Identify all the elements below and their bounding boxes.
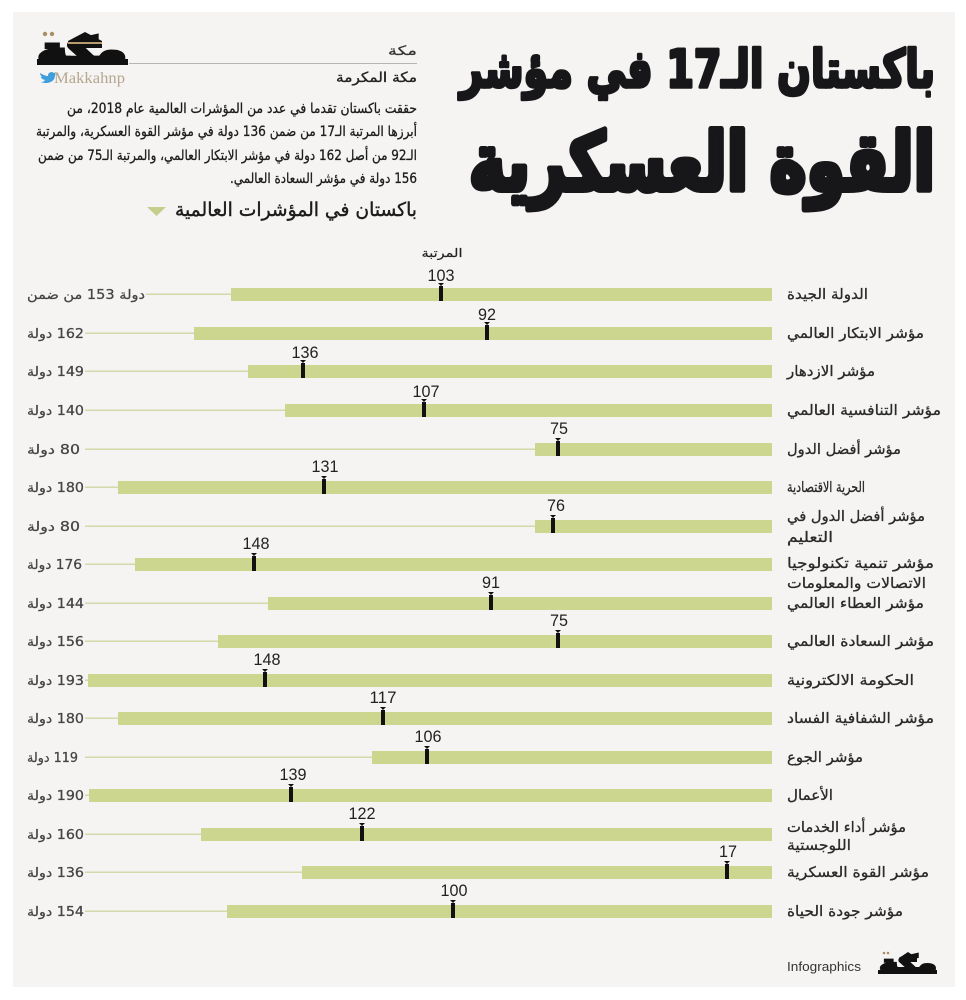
row: Business: 139 <box>280 765 306 784</box>
row: Prosperity <box>27 343 875 380</box>
row: Global Competitiveness: 140 دولة <box>27 404 84 419</box>
title <box>458 40 935 210</box>
row: Prosperity: 149 دولة <box>27 365 84 380</box>
row: ICT Development: مؤشر تنمية تكنولوجيا <box>787 556 934 572</box>
row: Best Countries for Education: التعليم <box>787 530 833 546</box>
row: World Happiness: 156 دولة <box>27 635 84 650</box>
row: Corruption Transparency: 117 <box>370 688 396 707</box>
row: Best Countries: 75 <box>550 419 568 438</box>
row: Best Countries for Education: 76 <box>547 496 565 515</box>
row: Economic Freedom: 180 دولة <box>27 481 84 496</box>
row: World Giving: 91 <box>482 573 500 592</box>
row: Logistics Performance: 122 <box>348 804 376 823</box>
row: ICT Development: 148 <box>242 534 270 553</box>
intro text: أبرزها المرتبة الـ17 من ضمن 136 دولة في مؤشر القوة العسكرية، والمرتبة <box>36 122 417 140</box>
row: Corruption Transparency: مؤشر الشفافية الفساد <box>787 711 934 727</box>
intro text: 156 دولة في مؤشر السعادة العالمي. <box>230 171 417 187</box>
row: Economic Freedom: الحرية الاقتصادية <box>787 480 865 496</box>
row: Hunger: 119 دولة <box>27 751 78 766</box>
row: Global Competitiveness: 107 <box>412 382 440 401</box>
row: Global Competitiveness <box>27 382 941 419</box>
intro text: حققت باكستان تقدما في عدد من المؤشرات العالمية عام 2018، من <box>67 101 417 117</box>
row: Economic Freedom: 131 <box>312 457 338 476</box>
row: Quality of Life: 100 <box>440 881 468 900</box>
row: Prosperity: مؤشر الازدهار <box>786 364 875 380</box>
row: Best Countries for Education: 80 دولة <box>27 520 80 535</box>
row: Global Innovation: 162 دولة <box>27 327 84 342</box>
bar chart <box>27 266 941 920</box>
row: World Happiness: 75 <box>550 611 568 630</box>
row: E-Government: 148 <box>254 650 280 669</box>
location: Makkah Al-Mukarramah: مكة المكرمة <box>336 70 417 86</box>
row: World Giving <box>27 573 924 612</box>
location: Makkah: مكة <box>388 44 417 59</box>
row: E-Government: 193 دولة <box>27 674 84 689</box>
row: Prosperity: 136 <box>292 343 318 362</box>
row: ICT Development: 176 دولة <box>27 558 82 573</box>
row: Best Countries for Education: مؤشر أفضل الدول في <box>787 506 925 525</box>
row: Best Countries: 80 دولة <box>27 443 80 458</box>
footer logo: مكة <box>880 952 936 977</box>
intro text <box>36 101 417 187</box>
footer credit: Infographics <box>787 959 862 974</box>
row: Logistics Performance: 160 دولة <box>27 828 84 843</box>
row: Military Strength: 17 <box>719 842 737 861</box>
row: ICT Development: الاتصالات والمعلومات <box>787 576 926 592</box>
row: Corruption Transparency <box>27 688 934 727</box>
icon: heading triangle <box>147 207 166 216</box>
row: World Giving: مؤشر العطاء العالمي <box>787 596 924 612</box>
row: Good Country: 103 <box>428 266 454 285</box>
row: Global Innovation: مؤشر الابتكار العالمي <box>787 326 924 342</box>
rank column label: المرتبة <box>422 246 462 261</box>
logo: Makkah newspaper: مكة <box>38 31 126 71</box>
row: World Happiness: مؤشر السعادة العالمي <box>787 634 934 650</box>
row: Logistics Performance: مؤشر أداء الخدمات <box>787 817 906 836</box>
row: ICT Development <box>27 534 934 592</box>
row: Good Country: دولة 153 من ضمن <box>27 288 145 303</box>
row: Best Countries: مؤشر أفضل الدول <box>787 439 901 458</box>
row: Best Countries <box>27 419 901 458</box>
row: Military Strength: مؤشر القوة العسكرية <box>787 865 929 881</box>
row: Quality of Life <box>27 881 903 920</box>
row: Hunger: مؤشر الجوع <box>787 750 863 766</box>
row: E-Government: الحكومة الالكترونية <box>787 673 914 689</box>
intro text: الـ92 من أصل 162 دولة في مؤشر الابتكار العالمي، والمرتبة الـ75 من ضمن <box>38 146 417 164</box>
footer logo <box>878 952 937 977</box>
row: Economic Freedom <box>27 457 865 496</box>
row: Global Innovation <box>27 305 924 342</box>
row: Quality of Life: 154 دولة <box>27 905 84 920</box>
row: Global Competitiveness: مؤشر التنافسية العالمي <box>787 403 941 419</box>
row: Best Countries for Education <box>27 496 925 546</box>
row: Logistics Performance: اللوجستية <box>787 838 851 854</box>
section heading: باكستان في المؤشرات العالمية <box>175 199 417 221</box>
row: World Happiness <box>27 611 934 650</box>
row: Global Innovation: 92 <box>478 305 496 324</box>
row: Business: 190 دولة <box>27 789 84 804</box>
row: Hunger: 106 <box>414 727 442 746</box>
row: Logistics Performance <box>27 804 906 854</box>
row: Corruption Transparency: 180 دولة <box>27 712 84 727</box>
row: Military Strength: 136 دولة <box>27 866 84 881</box>
logo: Makkah newspaper: Makkahnp <box>54 70 125 87</box>
row: E-Government <box>27 650 914 689</box>
row: Military Strength <box>27 842 929 881</box>
row: Business <box>27 765 833 804</box>
row: Business: الأعمال <box>787 786 833 804</box>
row: World Giving: 144 دولة <box>27 597 84 612</box>
row: Hunger <box>27 727 863 766</box>
logo: Makkah newspaper <box>37 31 417 87</box>
row: Quality of Life: مؤشر جودة الحياة <box>787 904 903 920</box>
row: Good Country <box>27 266 868 303</box>
row: Good Country: الدولة الجيدة <box>787 287 868 303</box>
